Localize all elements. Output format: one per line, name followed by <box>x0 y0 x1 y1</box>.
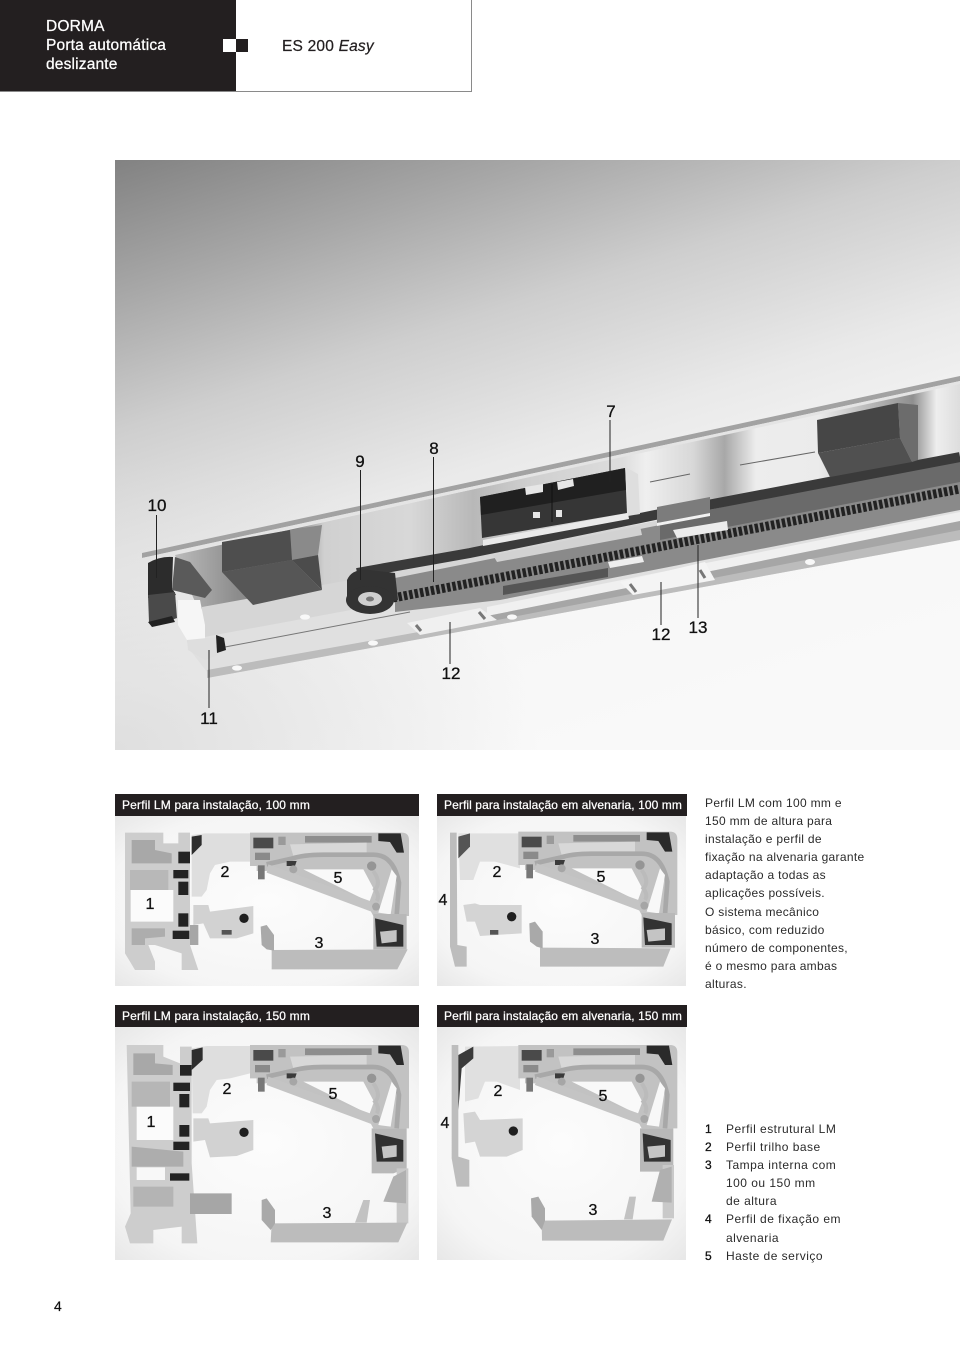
header black title block <box>0 0 236 91</box>
callout 12 upper: 12 <box>652 625 670 644</box>
cover upper <box>518 832 677 915</box>
white strip below box <box>483 513 629 546</box>
cover side wall <box>663 1165 674 1218</box>
description text: básico, com reduzido <box>705 923 825 937</box>
callout 10 <box>148 496 166 578</box>
top lip <box>142 376 960 558</box>
heading: Perfil LM 150 mm: Perfil LM para instalação, 150 mm <box>122 1009 310 1023</box>
legend descriptions: Perfil estrutural LM <box>726 1122 836 1136</box>
cover lip <box>272 949 408 969</box>
right motor box upper <box>817 403 900 453</box>
callout 12 lower <box>442 622 460 683</box>
numbers <box>147 1081 338 1222</box>
legend numbers: 2 <box>705 1140 712 1154</box>
numbers <box>439 864 606 948</box>
numbers: 3 <box>315 935 324 952</box>
panel: LM 150 mm section <box>115 1027 419 1260</box>
cover dark lower block <box>642 913 675 948</box>
wall fixing plate <box>452 1045 469 1187</box>
title text: Porta automática <box>46 37 166 54</box>
left motor box lower <box>222 560 322 605</box>
bed below teeth <box>503 568 608 595</box>
bright strip <box>487 512 960 616</box>
title text: DORMA <box>46 18 105 35</box>
photo background <box>115 816 419 986</box>
description text: número de componentes, <box>705 941 848 955</box>
carriage strip <box>657 513 710 526</box>
legend descriptions: Tampa interna com <box>726 1158 836 1172</box>
legend descriptions <box>726 1122 841 1263</box>
heading: alvenaria 100 mm: Perfil para instalação em alvenaria, 100 mm <box>444 798 682 812</box>
cover dark lower block <box>372 1128 407 1173</box>
legend numbers: 1 <box>705 1122 712 1136</box>
photo background <box>437 1027 686 1260</box>
description text: instalação e perfil de <box>705 832 822 846</box>
white teeth strip <box>673 521 728 538</box>
icon: black square <box>236 39 248 52</box>
left motor box upper <box>222 530 292 572</box>
description text: adaptação a todas as <box>705 868 826 882</box>
numbers: 5 <box>599 1088 608 1105</box>
legend descriptions: de altura <box>726 1194 777 1208</box>
end bracket 10 <box>148 557 212 627</box>
roller carriage <box>463 1112 523 1157</box>
back silver panel <box>175 382 960 625</box>
numbers: 5 <box>597 869 606 886</box>
grey lower flange <box>207 528 960 678</box>
numbers <box>146 864 343 952</box>
legend numbers: 5 <box>705 1249 712 1263</box>
callout 13: 13 <box>689 618 707 637</box>
numbers: 2 <box>223 1081 232 1098</box>
left box dark side <box>292 555 322 590</box>
description text <box>705 796 864 991</box>
base flange <box>190 498 960 672</box>
callout 12 upper <box>652 582 670 644</box>
rail mounting holes <box>232 559 815 671</box>
numbers: 4 <box>439 892 448 909</box>
numbers: 3 <box>589 1202 598 1219</box>
numbers: 2 <box>494 1083 503 1100</box>
base track <box>192 1046 250 1113</box>
numbers <box>441 1083 608 1219</box>
heading: Perfil LM 150 mm <box>115 1005 419 1027</box>
control box dark upper <box>480 468 626 515</box>
end cap 11 <box>187 637 218 660</box>
cover upper <box>518 1045 677 1128</box>
cover upper <box>250 1045 409 1128</box>
cover dark lower block <box>640 1128 673 1172</box>
dark seam <box>225 612 410 647</box>
heading: Perfil LM 100 mm: Perfil LM para instalação, 100 mm <box>122 798 310 812</box>
cover upper <box>250 833 409 916</box>
rack bed <box>395 465 960 612</box>
numbers: 4 <box>441 1115 450 1132</box>
callout 13 <box>689 545 707 637</box>
legend descriptions: 100 ou 150 mm <box>726 1176 816 1190</box>
base track <box>192 833 250 897</box>
numbers: 1 <box>147 1114 156 1131</box>
legend descriptions: alvenaria <box>726 1231 779 1245</box>
back panel thin lines <box>650 452 815 482</box>
legend <box>705 1122 841 1263</box>
panel: wall fixing 150 mm section <box>437 1027 686 1260</box>
grey strip under bright <box>487 521 960 622</box>
cover dark lower block <box>373 914 407 949</box>
toothed rack <box>393 489 960 598</box>
legend descriptions: Perfil de fixação em <box>726 1212 841 1226</box>
cover lip <box>271 1223 407 1242</box>
numbers: 5 <box>329 1086 338 1103</box>
photo background <box>437 816 686 986</box>
legend descriptions: Perfil trilho base <box>726 1140 821 1154</box>
callout 7: 7 <box>606 402 616 421</box>
plate pins <box>416 570 705 631</box>
heading: alvenaria 150 mm <box>437 1005 687 1027</box>
legend numbers <box>705 1122 712 1263</box>
mid bright strips <box>608 556 644 568</box>
profile drawing <box>125 833 409 970</box>
carriage block <box>657 497 710 523</box>
pulley <box>346 570 398 614</box>
belt <box>357 457 960 573</box>
roller carriage <box>193 905 253 938</box>
profile drawing <box>125 1045 409 1243</box>
end cap notch <box>216 635 226 653</box>
front silver panel <box>187 462 960 678</box>
title text <box>46 18 166 73</box>
legend numbers: 4 <box>705 1212 712 1226</box>
left box side shadow <box>290 525 322 560</box>
profile drawing <box>452 1045 677 1241</box>
description text: fixação na alvenaria garante <box>705 850 864 864</box>
cover lip <box>542 1219 672 1241</box>
wall fixing plate <box>450 833 467 967</box>
profile lower bar <box>190 1193 232 1214</box>
numbers: 2 <box>221 864 230 881</box>
photo background <box>115 160 960 750</box>
legend descriptions: Haste de serviço <box>726 1249 823 1263</box>
description text: alturas. <box>705 977 747 991</box>
roller carriage <box>463 903 522 936</box>
description text: O sistema mecânico <box>705 905 819 919</box>
product name: ES 200 Easy <box>282 38 374 55</box>
numbers: 1 <box>146 896 155 913</box>
callout 11: 11 <box>200 709 218 728</box>
roller carriage <box>193 1118 253 1157</box>
description text: Perfil LM com 100 mm e <box>705 796 842 810</box>
callout 9: 9 <box>355 452 365 471</box>
right motor box shadow <box>898 403 918 462</box>
header band <box>0 0 472 92</box>
right motor box lower <box>818 438 912 477</box>
numbers: 3 <box>591 931 600 948</box>
base track <box>465 1046 520 1102</box>
control box 7 <box>480 468 627 538</box>
callout 8: 8 <box>429 439 439 458</box>
heading: alvenaria 100 mm <box>437 794 687 816</box>
callout 9 <box>355 452 365 580</box>
legend numbers: 3 <box>705 1158 712 1172</box>
callout 7 <box>606 402 616 482</box>
callout 11 <box>200 650 218 728</box>
heading: alvenaria 150 mm: Perfil para instalação em alvenaria, 150 mm <box>444 1009 682 1023</box>
description text: é o mesmo para ambas <box>705 959 837 973</box>
light plate <box>493 526 642 562</box>
pale lip below <box>142 381 960 561</box>
LM structural profile <box>125 1045 197 1243</box>
main product photo with numbered callouts <box>115 160 960 750</box>
callout 10: 10 <box>148 496 166 515</box>
connectors <box>525 479 574 518</box>
numbers: 2 <box>493 864 502 881</box>
icon: white square <box>223 39 236 52</box>
heading: Perfil LM 100 mm <box>115 794 419 816</box>
end of box support <box>627 468 640 516</box>
description text: 150 mm de altura para <box>705 814 832 828</box>
LM structural profile <box>125 833 198 970</box>
dark upper bed <box>660 458 960 540</box>
panel: LM 100 mm section <box>115 816 419 986</box>
cover side wall <box>397 1168 408 1223</box>
profile drawing <box>450 832 677 967</box>
description text: aplicações possíveis. <box>705 886 825 900</box>
photo background <box>115 1027 419 1260</box>
white gap under bracket <box>178 600 205 640</box>
numbers: 5 <box>334 870 343 887</box>
title text: deslizante <box>46 56 118 73</box>
page number: 4 <box>54 1298 62 1314</box>
control box divider <box>551 484 553 522</box>
callout 12 lower: 12 <box>442 664 460 683</box>
door rail assembly <box>142 376 960 678</box>
mounting plate right <box>620 562 715 595</box>
numbers: 3 <box>323 1205 332 1222</box>
base track <box>458 833 520 880</box>
mounting plate left <box>407 608 497 635</box>
cover lip <box>540 948 671 967</box>
panel: wall fixing 100 mm section <box>437 816 686 986</box>
